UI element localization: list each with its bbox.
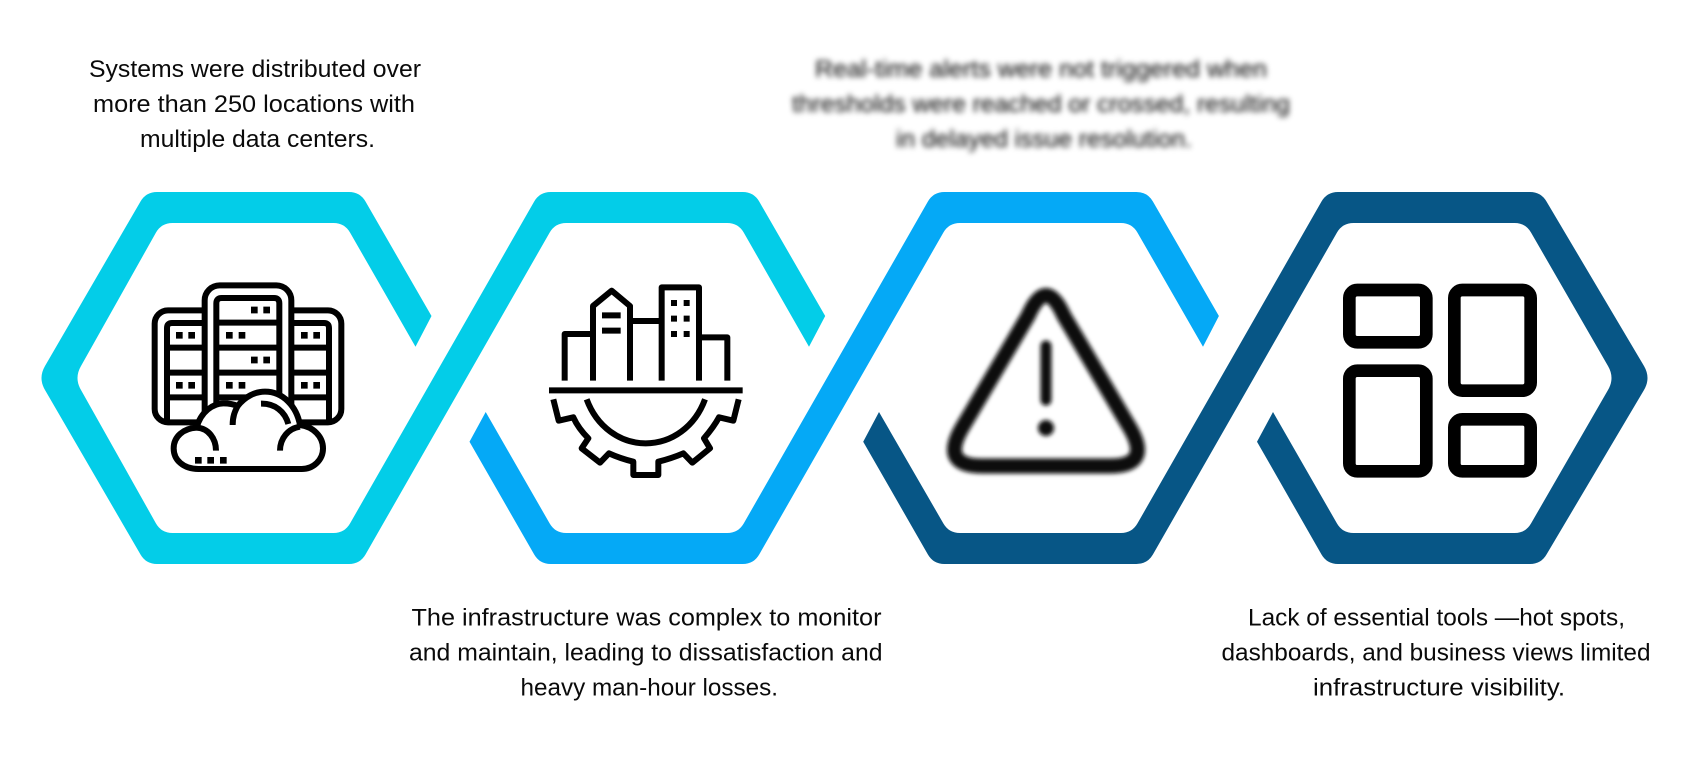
text: lack of tools: dashboards, and business views limited xyxy=(1222,640,1650,667)
text: real-time alerts (blurred): in delayed issue resolution. xyxy=(896,126,1192,153)
text: systems distributed: multiple data centers. xyxy=(140,126,375,153)
text: systems distributed: more than 250 locations with xyxy=(93,91,415,118)
text: systems distributed xyxy=(89,56,421,153)
text: real-time alerts (blurred) xyxy=(792,56,1290,153)
text: systems distributed: Systems were distributed over xyxy=(89,56,421,83)
text: real-time alerts (blurred): Real-time alerts were not triggered when xyxy=(815,56,1267,83)
icon: server racks with cloud xyxy=(155,285,341,469)
text: infrastructure complexity: The infrastructure was complex to monitor xyxy=(412,605,882,632)
text: lack of tools: Lack of essential tools —hot spots, xyxy=(1248,605,1625,632)
text: infrastructure complexity: and maintain, leading to dissatisfaction and xyxy=(409,640,882,667)
icon: dashboard tiles xyxy=(1349,290,1531,471)
text: infrastructure complexity: heavy man-hour losses. xyxy=(520,675,778,702)
text: lack of tools xyxy=(1222,605,1650,702)
hexagon chain: blue hexagons 2 and 3 xyxy=(470,192,1219,564)
text: infrastructure complexity xyxy=(409,605,882,702)
text: lack of tools: infrastructure visibility. xyxy=(1313,675,1565,702)
icon: city on gear xyxy=(549,287,743,475)
text: real-time alerts (blurred): thresholds were reached or crossed, resulting xyxy=(792,91,1290,118)
icon: warning triangle (blurred) xyxy=(954,296,1138,466)
hexagon chain: cyan hexagons 1 and 2 xyxy=(42,192,825,564)
hexagon chain: dark blue hexagons 3 and 4 xyxy=(863,192,1648,564)
